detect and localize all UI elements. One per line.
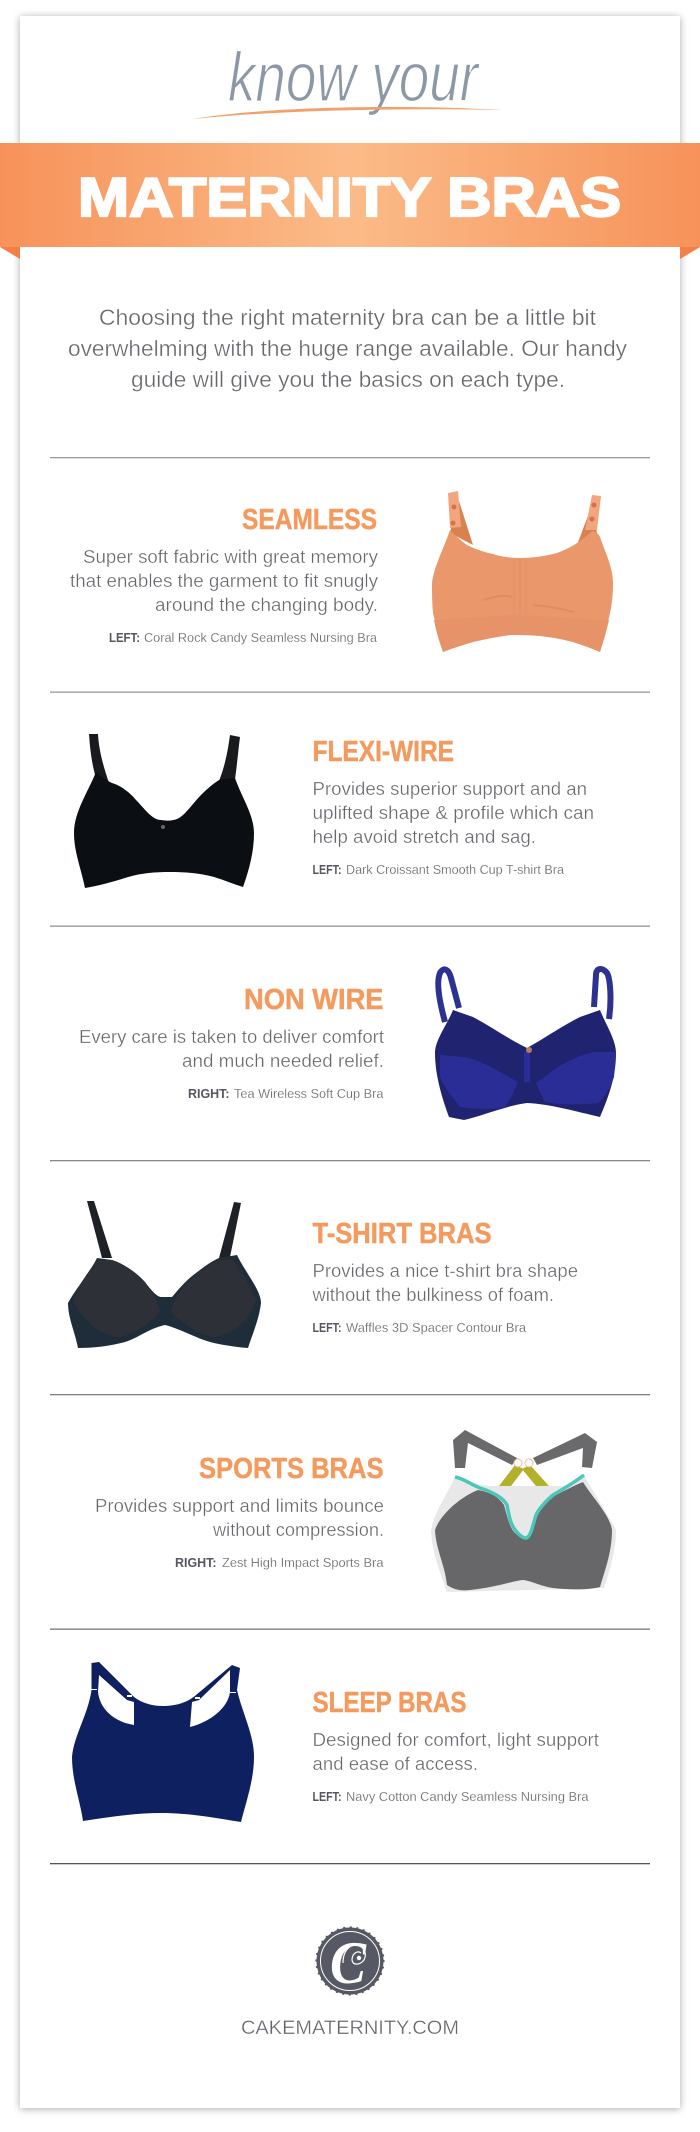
caption: non wire: RIGHT: <box>188 1087 230 1101</box>
intro text: Choosing the right maternity bra can be a little bit <box>99 305 596 330</box>
description: seamless: Super soft fabric with great memory <box>83 547 378 567</box>
panel: flexi-wire <box>74 734 594 888</box>
caption: flexi-wire: LEFT: <box>312 863 342 877</box>
heading: seamless: SEAMLESS <box>242 504 377 536</box>
panel: sleep bras <box>72 1662 599 1822</box>
intro text: overwhelming with the huge range available. Our handy <box>68 336 627 361</box>
description: t-shirt bras <box>311 1261 578 1305</box>
description: t-shirt bras: without the bulkiness of foam. <box>311 1285 554 1305</box>
caption: seamless: Coral Rock Candy Seamless Nursing Bra <box>144 631 377 645</box>
ribbon <box>0 143 700 259</box>
image: black flexi-wire bra <box>74 734 254 888</box>
description: sports bras: Provides support and limits bounce <box>95 1496 384 1516</box>
caption: flexi-wire: Dark Croissant Smooth Cup T-shirt Bra <box>346 863 564 877</box>
script title: know your <box>228 38 480 116</box>
footer <box>241 1928 459 2039</box>
caption: sleep bras: Navy Cotton Candy Seamless Nursing Bra <box>346 1790 589 1804</box>
description: flexi-wire <box>312 779 594 847</box>
heading: flexi-wire: FLEXI-WIRE <box>312 736 454 768</box>
description: sports bras <box>95 1496 384 1540</box>
caption: sleep bras: LEFT: <box>312 1790 342 1804</box>
description: seamless: that enables the garment to fit snugly <box>70 571 378 591</box>
description: flexi-wire: Provides superior support and an <box>312 779 587 799</box>
logo <box>316 1928 384 1996</box>
description: flexi-wire: help avoid stretch and sag. <box>312 827 536 847</box>
main title: MATERNITY BRAS <box>78 166 621 228</box>
logo: C <box>330 1930 367 1996</box>
heading: sleep bras: SLEEP BRAS <box>312 1687 466 1719</box>
description: seamless: around the changing body. <box>155 595 378 615</box>
description: sleep bras: Designed for comfort, light support <box>312 1730 599 1750</box>
description: sleep bras <box>312 1730 599 1774</box>
description: sports bras: without compression. <box>212 1520 384 1540</box>
underline swoosh <box>194 107 502 119</box>
image: navy sleep bra <box>72 1662 254 1822</box>
caption: t-shirt bras: LEFT: <box>312 1321 342 1335</box>
panel: t-shirt bras <box>68 1201 578 1348</box>
panel: non wire <box>79 969 616 1120</box>
description: seamless <box>70 547 378 615</box>
caption: sports bras: Zest High Impact Sports Bra <box>222 1556 384 1570</box>
panel: seamless <box>70 491 613 652</box>
image: navy non-wire bra <box>435 969 616 1120</box>
heading: t-shirt bras: T-SHIRT BRAS <box>312 1218 492 1250</box>
description: sleep bras: and ease of access. <box>312 1754 478 1774</box>
description: t-shirt bras: Provides a nice t-shirt bra shape <box>312 1261 578 1281</box>
image: coral seamless bra <box>432 491 613 652</box>
caption: t-shirt bras: Waffles 3D Spacer Contour Bra <box>346 1321 526 1335</box>
heading: sports bras: SPORTS BRAS <box>199 1453 384 1485</box>
panel: sports bras <box>95 1430 616 1592</box>
intro text: guide will give you the basics on each type. <box>131 367 565 392</box>
caption: non wire: Tea Wireless Soft Cup Bra <box>234 1087 384 1101</box>
image: grey sports bra <box>431 1430 616 1592</box>
description: non wire: Every care is taken to deliver comfort <box>79 1027 384 1047</box>
caption: seamless: LEFT: <box>109 631 140 645</box>
description: non wire <box>79 1027 384 1071</box>
image: charcoal t-shirt bra <box>68 1201 261 1348</box>
intro text <box>68 305 627 392</box>
heading: non wire: NON WIRE <box>244 984 384 1016</box>
description: flexi-wire: uplifted shape & profile which can <box>312 803 594 823</box>
caption: sports bras: RIGHT: <box>175 1556 216 1570</box>
description: non wire: and much needed relief. <box>182 1051 384 1071</box>
header <box>0 38 700 259</box>
website: CAKEMATERNITY.COM <box>241 2017 459 2039</box>
